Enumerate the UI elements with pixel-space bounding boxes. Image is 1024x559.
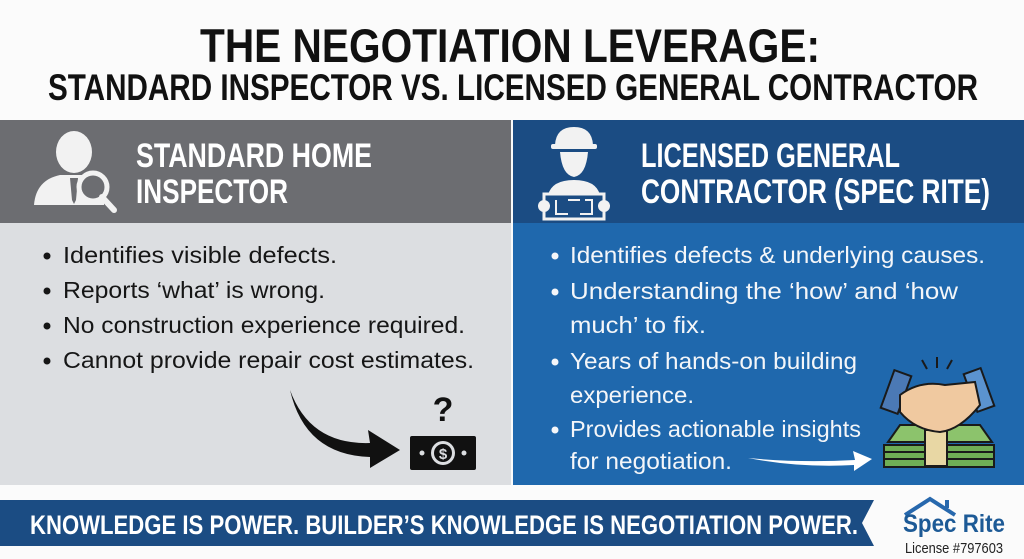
text block: contractor bullets: experience. <box>570 382 694 408</box>
banner: bottom tagline <box>0 500 874 546</box>
text block: inspector bullets: No construction experience required. <box>63 312 465 338</box>
title: THE NEGOTIATION LEVERAGE: <box>200 19 820 72</box>
text block: inspector bullets: Identifies visible defects. <box>63 242 337 268</box>
icon: inspector with magnifier <box>34 131 114 210</box>
logo: spec rite: License #797603 <box>905 540 1003 557</box>
panel: licensed general contractor <box>513 120 1024 485</box>
text block: contractor bullets: Understanding the ‘how’ and ‘how <box>570 278 958 304</box>
panel: standard home inspector <box>0 120 511 485</box>
text block: contractor bullets <box>552 242 985 474</box>
icon: money with question mark: $ <box>439 446 448 463</box>
logo: spec rite <box>903 499 1005 557</box>
text block: contractor bullets: Years of hands-on building <box>570 348 857 374</box>
heading: licensed general contractor: LICENSED GENERAL <box>641 137 900 175</box>
icon: money with question mark <box>410 391 476 470</box>
heading: standard home inspector: INSPECTOR <box>136 173 288 211</box>
text block: contractor bullets: Provides actionable insights <box>570 416 861 442</box>
title <box>48 19 978 108</box>
icon: contractor with blueprint <box>538 127 610 219</box>
arrow: white <box>748 451 872 471</box>
heading: licensed general contractor <box>641 137 990 211</box>
text block: inspector bullets: Reports ‘what’ is wrong. <box>63 277 325 303</box>
text block: inspector bullets <box>44 242 474 373</box>
icon: money with question mark: ? <box>433 391 453 429</box>
arrow: curved black <box>290 390 400 468</box>
logo: spec rite: Spec Rite <box>903 510 1005 538</box>
text block: contractor bullets: for negotiation. <box>570 448 732 474</box>
text block: contractor bullets: much’ to fix. <box>570 312 706 338</box>
heading: standard home inspector <box>136 137 372 211</box>
heading: standard home inspector: STANDARD HOME <box>136 137 372 175</box>
text block: inspector bullets: Cannot provide repair cost estimates. <box>63 347 474 373</box>
icon: handshake over money <box>881 357 994 467</box>
banner: bottom tagline: KNOWLEDGE IS POWER. BUILDER’S KNOWLEDGE IS NEGOTIATION POWER. <box>30 510 858 540</box>
text block: contractor bullets: Identifies defects & underlying causes. <box>570 242 985 268</box>
